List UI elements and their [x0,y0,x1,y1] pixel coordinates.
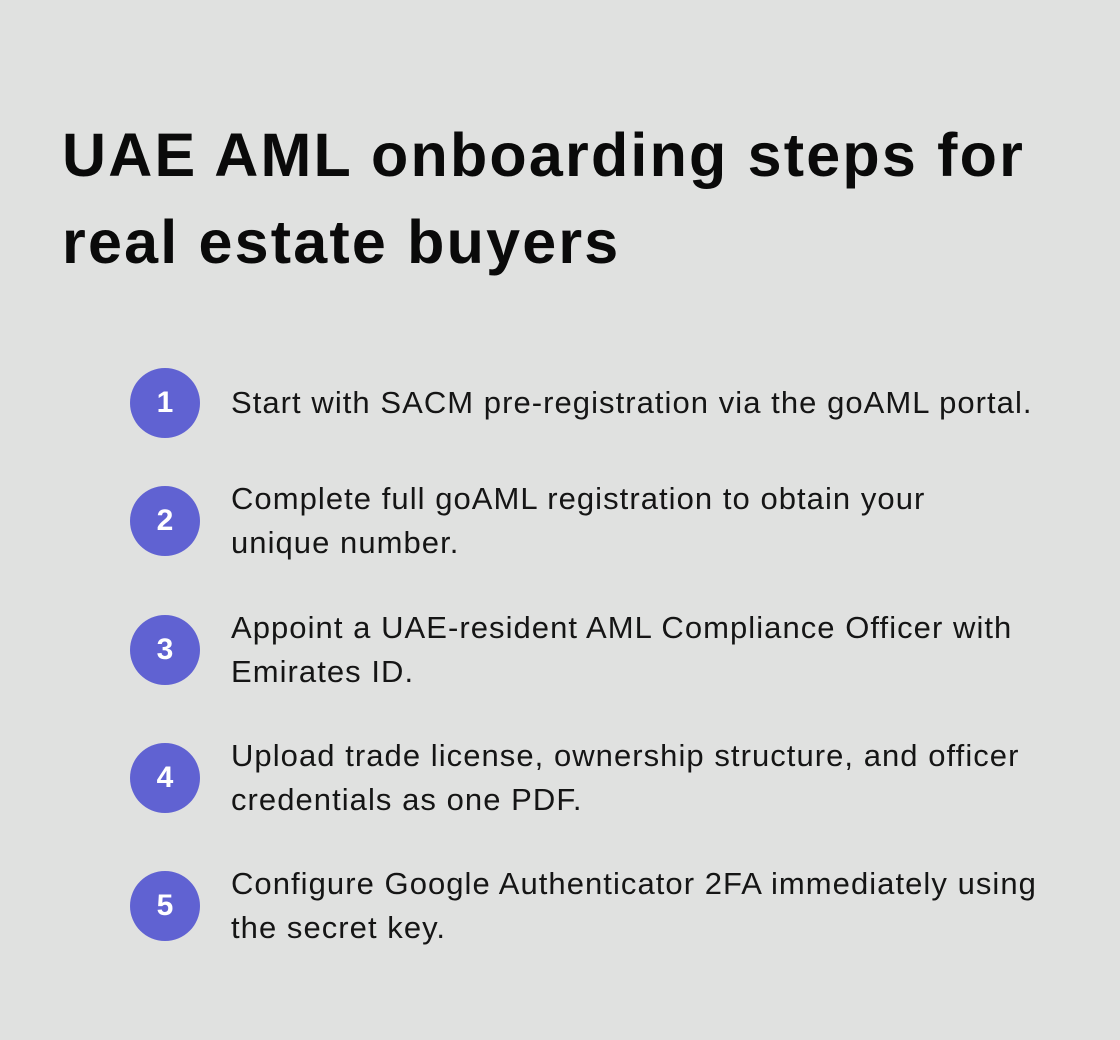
text: step 2 [231,481,925,560]
title [62,121,1025,276]
text: step 3: Appoint a UAE-resident AML Compliance Officer with [231,610,1012,645]
icon: number 5: 5 [157,889,173,922]
icon: number 1: 1 [157,386,173,419]
icon: number 5 [130,871,200,941]
title: real estate buyers [62,208,620,276]
title: UAE AML onboarding steps for [62,121,1025,189]
text: step 5 [231,866,1037,945]
text: step 4 [231,738,1019,817]
text: step 4: credentials as one PDF. [231,782,583,817]
icon: number 4: 4 [157,761,173,794]
icon: number 2 [130,486,200,556]
step 3 [130,610,1012,689]
text: step 1: Start with SACM pre-registration via the goAML portal. [231,385,1033,420]
icon: number 4 [130,743,200,813]
icon: number 2: 2 [157,504,173,537]
step 1 [130,368,1033,438]
icon: number 3: 3 [157,633,173,666]
step 5 [130,866,1037,945]
step 4 [130,738,1019,817]
text: step 3: Emirates ID. [231,654,414,689]
text: step 2: Complete full goAML registration to obtain your [231,481,925,516]
icon: number 1 [130,368,200,438]
text: step 3 [231,610,1012,689]
text: step 5: the secret key. [231,910,446,945]
text: step 5: Configure Google Authenticator 2FA immediately using [231,866,1037,901]
icon: number 3 [130,615,200,685]
text: step 2: unique number. [231,525,459,560]
step 2 [130,481,925,560]
text: step 4: Upload trade license, ownership structure, and officer [231,738,1019,773]
